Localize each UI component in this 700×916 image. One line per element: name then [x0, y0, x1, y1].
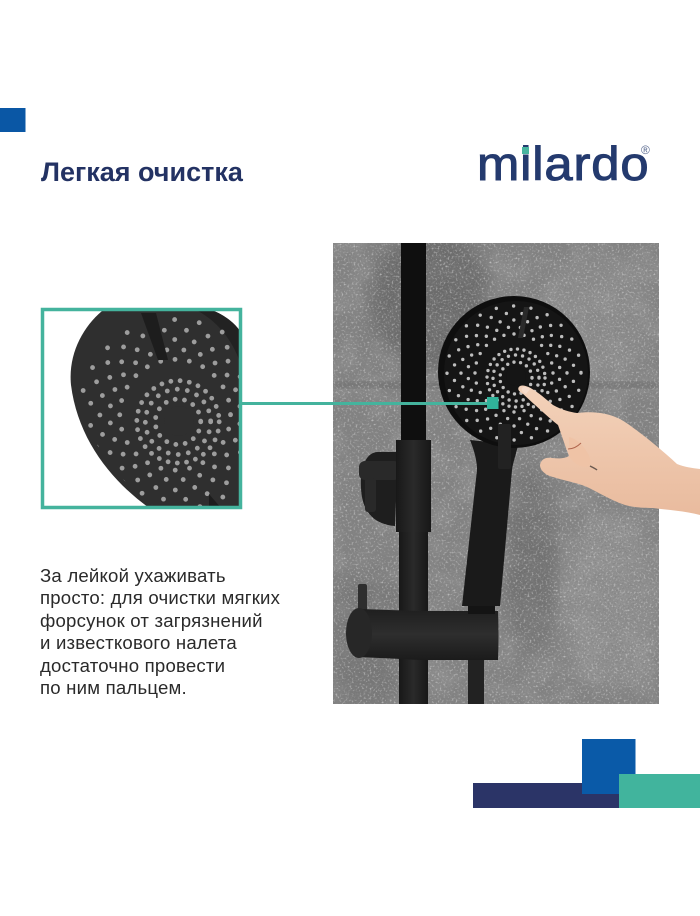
body text — [40, 565, 280, 698]
body text: и известкового налета — [40, 632, 237, 653]
hand pressing the shower head — [518, 385, 700, 515]
photo: concrete wall with shower — [330, 230, 660, 710]
logo: milardo: milardo — [477, 137, 649, 190]
shower head — [438, 296, 590, 448]
concrete wall background — [330, 230, 660, 710]
body text: достаточно провести — [40, 655, 225, 676]
slider cylinder — [346, 606, 498, 660]
inset: close-up of shower head — [40, 308, 242, 510]
hand shower handle — [462, 440, 518, 606]
body text: по ним пальцем. — [40, 677, 187, 698]
title: Легкая очистка — [41, 157, 243, 187]
inset head close-up — [70, 311, 239, 506]
bottom decorative blocks — [473, 739, 700, 808]
logo: milardo: ® — [641, 143, 650, 157]
body text: просто: для очистки мягких — [40, 587, 280, 608]
teal connector line — [242, 402, 492, 405]
top-left blue square — [0, 108, 26, 132]
body text: За лейкой ухаживать — [40, 565, 226, 586]
vertical pole — [396, 243, 431, 704]
inset teal frame — [42, 310, 240, 508]
body text: форсунок от загрязнений — [40, 610, 263, 631]
wall bracket — [359, 452, 400, 526]
hose — [468, 660, 484, 704]
slider pin — [358, 584, 367, 610]
connector end square — [487, 397, 498, 409]
